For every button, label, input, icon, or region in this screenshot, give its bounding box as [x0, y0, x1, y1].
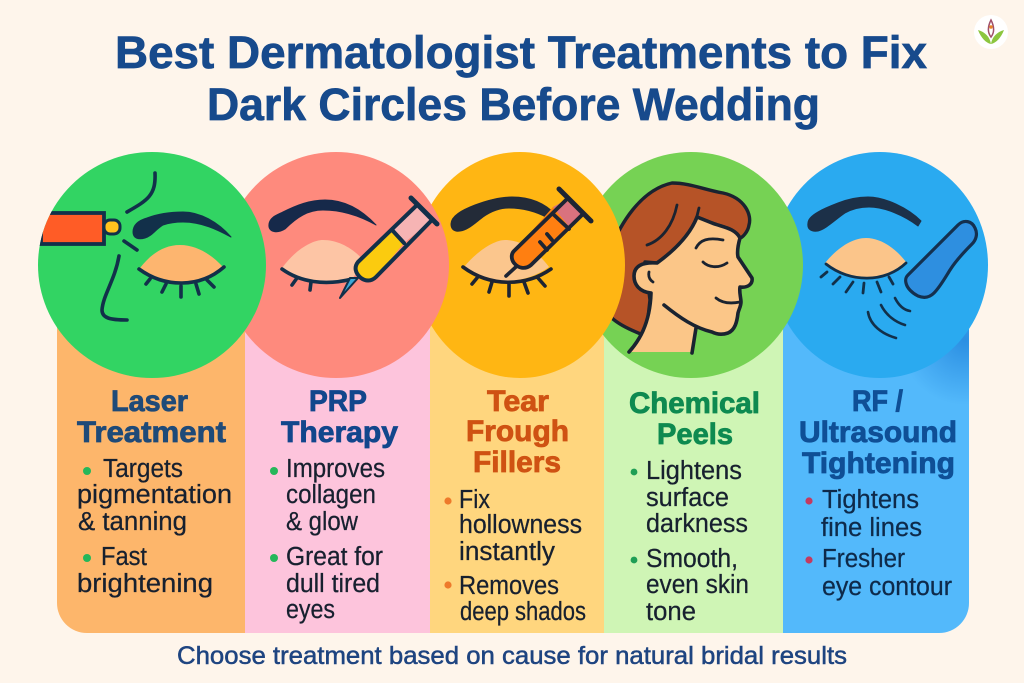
heading: RF / Ultrasound Tightening: RF /	[852, 385, 903, 418]
bullets: PRP Therapy: collagen	[286, 481, 376, 509]
title: Dark Circles Before Wedding	[207, 79, 820, 130]
heading: RF / Ultrasound Tightening: Tightening	[802, 447, 955, 480]
bullets: Tear Trough Fillers: Removes	[459, 572, 559, 600]
bullets: Chemical Peels	[631, 457, 749, 626]
bullets: PRP Therapy	[270, 455, 385, 624]
bullets: Laser Treatment: Fast	[101, 543, 147, 571]
bullets: RF / Ultrasound Tightening	[805, 486, 952, 601]
bullets: Laser Treatment: pigmentation	[77, 481, 232, 509]
bullets: Tear Trough Fillers: Fix	[459, 486, 490, 514]
icon: RF device and eye	[808, 197, 976, 338]
heading: RF / Ultrasound Tightening: Ultrasound	[799, 416, 957, 449]
bullets: Chemical Peels: even skin	[646, 571, 749, 599]
panel: Laser Treatment text	[77, 385, 232, 598]
panel: RF / Ultrasound circle	[772, 152, 988, 378]
bullets: Laser Treatment	[77, 455, 232, 598]
bullets: Chemical Peels: darkness	[646, 510, 748, 538]
bullets: Laser Treatment: Targets	[103, 455, 183, 483]
bullets: RF / Ultrasound Tightening: fine lines	[821, 514, 922, 542]
bullets: Chemical Peels: surface	[646, 484, 729, 512]
heading: Laser Treatment: Laser	[111, 385, 188, 418]
heading: Laser Treatment	[77, 385, 226, 449]
heading: PRP Therapy	[281, 385, 399, 449]
heading: Chemical Peels: Chemical	[629, 387, 760, 420]
icon: filler syringe and eye	[451, 189, 591, 296]
heading: Chemical Peels	[629, 387, 760, 451]
heading: Chemical Peels: Peels	[657, 418, 733, 451]
panel: PRP Therapy text	[270, 385, 399, 624]
bullets: Tear Trough Fillers: hollowness	[459, 511, 582, 539]
bullets: Tear Trough Fillers	[444, 486, 586, 626]
panel: Tear Trough Fillers text	[444, 385, 586, 626]
panel: RF / Ultrasound Tightening text	[799, 385, 957, 601]
icon: laser device and eye	[41, 173, 231, 320]
title	[115, 27, 927, 130]
heading: PRP Therapy: Therapy	[281, 416, 399, 449]
bullets: PRP Therapy: Great for	[286, 543, 383, 571]
heading: Tear Frough Fillers	[466, 385, 569, 479]
bullets: Laser Treatment: brightening	[77, 570, 213, 598]
bullets: PRP Therapy: & glow	[286, 508, 359, 536]
bullets: Chemical Peels: Lightens	[646, 457, 742, 485]
panel: PRP circle	[223, 152, 449, 378]
panel: Laser circle	[38, 152, 266, 378]
footer caption: Choose treatment based on cause for natural bridal results	[177, 642, 847, 670]
heading: PRP Therapy: PRP	[309, 385, 367, 418]
bullets: RF / Ultrasound Tightening: eye contour	[822, 573, 952, 601]
bullets: Laser Treatment: & tanning	[78, 508, 187, 536]
panel: Tear Trough circle	[415, 152, 625, 378]
heading: Laser Treatment: Treatment	[77, 416, 226, 449]
panel: column backgrounds	[57, 300, 969, 633]
bullets: Chemical Peels: tone	[646, 598, 696, 626]
bullets: PRP Therapy: Improves	[286, 455, 385, 483]
heading: Tear Frough Fillers: Fillers	[473, 446, 561, 479]
icon: woman face profile	[605, 183, 752, 353]
heading: Tear Frough Fillers: Tear	[487, 385, 550, 418]
panel: Chemical Peels circle	[579, 152, 803, 378]
bullets: Tear Trough Fillers: deep shados	[460, 598, 586, 626]
title: Best Dermatologist Treatments to Fix	[115, 27, 927, 78]
icon: PRP syringe and eye	[269, 198, 437, 298]
logo	[974, 15, 1008, 49]
bullets: PRP Therapy: eyes	[286, 596, 335, 624]
heading: RF / Ultrasound Tightening	[799, 385, 957, 480]
bullets: RF / Ultrasound Tightening: Tightens	[822, 486, 919, 514]
heading: Tear Frough Fillers: Frough	[466, 415, 569, 448]
bullets: Chemical Peels: Smooth,	[646, 545, 738, 573]
bullets: PRP Therapy: dull tired	[286, 570, 380, 598]
bullets: Tear Trough Fillers: instantly	[459, 538, 555, 566]
bullets: RF / Ultrasound Tightening: Fresher	[822, 545, 905, 573]
panel: Chemical Peels text	[629, 387, 760, 626]
